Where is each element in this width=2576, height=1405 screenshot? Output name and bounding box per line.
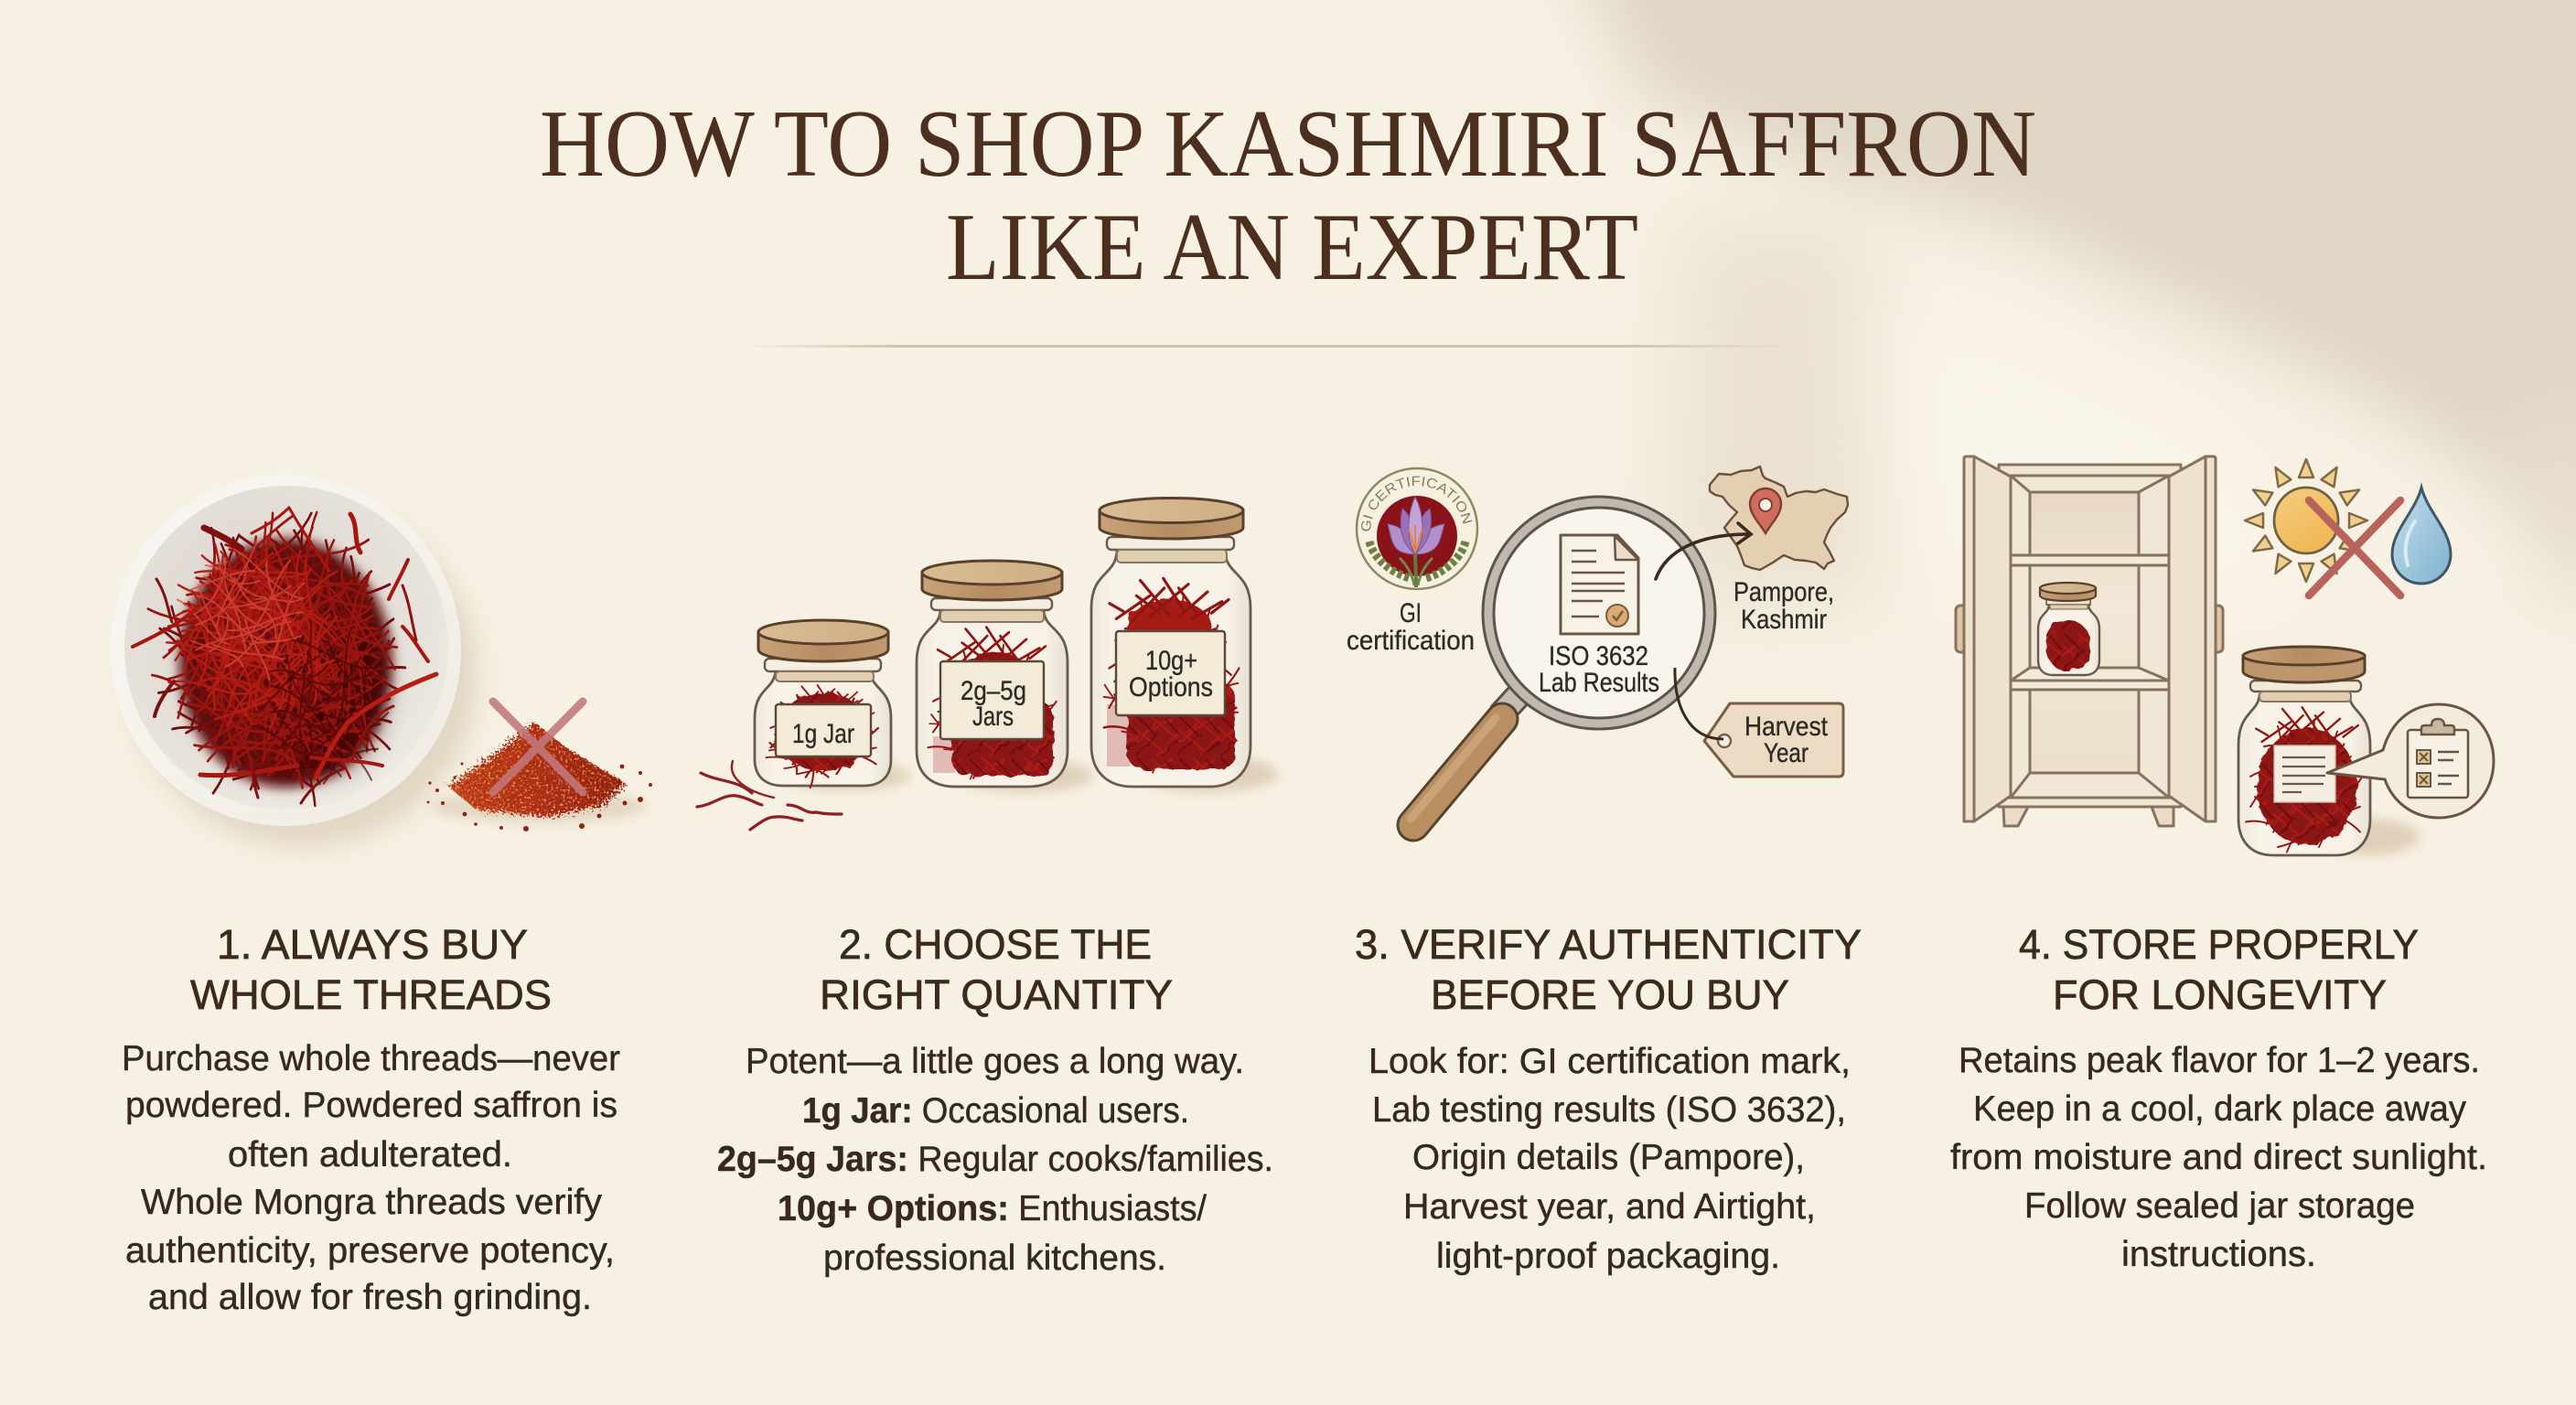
label: 2g-5g jars: Jars xyxy=(972,702,1014,732)
label: ISO 3632 lab results: ISO 3632 xyxy=(1549,641,1648,671)
icon: powdered saffron crossed out xyxy=(427,702,652,831)
text block: step 4: from moisture and direct sunlight. xyxy=(1950,1138,2487,1177)
text block: step 1: often adulterated. xyxy=(228,1135,512,1174)
text block: step 1 xyxy=(122,1039,620,1317)
text block: step 1: authenticity, preserve potency, xyxy=(125,1231,615,1271)
label: 1g jar: 1g Jar xyxy=(792,719,854,749)
text block: step 2: professional kitchens. xyxy=(823,1239,1166,1278)
icon: bowl of saffron threads xyxy=(110,475,478,847)
title: HOW TO SHOP KASHMIRI SAFFRON xyxy=(540,90,2036,197)
text block: step 3: Lab testing results (ISO 3632), xyxy=(1372,1090,1846,1130)
text block: step 4: instructions. xyxy=(2121,1235,2316,1274)
label: Pampore, Kashmir: Kashmir xyxy=(1741,605,1827,635)
text block: step 2: 2g–5g Jars: Regular cooks/families. xyxy=(717,1140,1273,1179)
icon: 10g+ jar xyxy=(1087,498,1279,792)
text block: step 1: powdered. Powdered saffron is xyxy=(125,1086,617,1125)
label: GI certification: GI xyxy=(1400,598,1422,628)
text block: step 3: light-proof packaging. xyxy=(1436,1237,1780,1276)
text block: step 1: and allow for fresh grinding. xyxy=(148,1278,592,1317)
text block: step 1: Whole Mongra threads verify xyxy=(141,1183,603,1222)
label: GI certification: certification xyxy=(1347,626,1475,656)
icon: 1g jar xyxy=(755,620,910,798)
label: 10g+ options: Options xyxy=(1129,672,1213,702)
label: 2g-5g jars: 2g–5g xyxy=(961,676,1026,706)
text block: step 4 xyxy=(1950,1041,2487,1274)
text block: step 2: 10g+ Options: Enthusiasts/ xyxy=(778,1189,1207,1228)
icon: harvest year tag xyxy=(1675,668,1843,777)
label: harvest year xyxy=(1744,712,1829,768)
icon: map of Kashmir with pin xyxy=(1710,467,1848,570)
heading: step 2 xyxy=(820,921,1173,1018)
text block: step 4: Follow sealed jar storage xyxy=(2024,1186,2415,1226)
label: Pampore, Kashmir xyxy=(1733,577,1834,635)
title: LIKE AN EXPERT xyxy=(946,193,1638,300)
text block: step 2: Potent—a little goes a long way. xyxy=(746,1042,1244,1081)
text block: step 3: Origin details (Pampore), xyxy=(1412,1138,1805,1177)
icon: open cabinet xyxy=(1956,456,2223,826)
text block: step 2: 1g Jar: Occasional users. xyxy=(802,1091,1189,1131)
text block: step 3 xyxy=(1368,1042,1851,1276)
label: ISO 3632 lab results: Lab Results xyxy=(1539,668,1659,698)
icon: magnifying glass xyxy=(1411,502,1710,825)
heading: step 2: RIGHT QUANTITY xyxy=(820,971,1173,1018)
label: harvest year: Harvest xyxy=(1744,712,1829,742)
heading: step 3: 3. VERIFY AUTHENTICITY xyxy=(1355,921,1862,968)
panel: step 4 storage xyxy=(1950,456,2494,1274)
label: Pampore, Kashmir: Pampore, xyxy=(1733,577,1834,607)
icon: sealed jar with label xyxy=(2238,647,2420,855)
text block: step 4: Retains peak flavor for 1–2 years. xyxy=(1959,1041,2480,1080)
panel: step 2 quantity xyxy=(697,498,1279,1278)
icon: GI certification badge: GI CERTIFICATION xyxy=(1361,476,1473,531)
icon: lab document xyxy=(1561,535,1638,634)
icon: loose threads xyxy=(697,761,842,830)
label: GI certification xyxy=(1347,598,1475,656)
icon: 2g-5g jar xyxy=(917,561,1093,792)
heading: step 1: 1. ALWAYS BUY xyxy=(217,921,528,968)
icon: no sun and moisture xyxy=(2245,459,2451,595)
icon: jar on shelf xyxy=(2038,583,2099,675)
label: 10g+ options: 10g+ xyxy=(1145,646,1197,676)
heading: step 3: BEFORE YOU BUY xyxy=(1431,971,1789,1018)
heading: step 1 xyxy=(190,921,552,1018)
text block: step 3: Harvest year, and Airtight, xyxy=(1403,1187,1816,1227)
panel: step 1 whole threads xyxy=(110,475,652,1317)
callout: storage checklist xyxy=(2327,704,2494,818)
text block: step 1: Purchase whole threads—never xyxy=(122,1039,620,1078)
label: 2g-5g jars xyxy=(961,676,1026,732)
heading: step 4 xyxy=(2019,921,2419,1018)
icon: GI certification badge xyxy=(1356,467,1478,591)
label: harvest year: Year xyxy=(1764,738,1809,768)
heading: step 4: FOR LONGEVITY xyxy=(2053,971,2387,1018)
text block: step 4: Keep in a cool, dark place away xyxy=(1973,1089,2466,1129)
text block: step 3: Look for: GI certification mark, xyxy=(1368,1042,1851,1081)
panel: step 3 authenticity xyxy=(1347,465,1862,1276)
heading: step 2: 2. CHOOSE THE xyxy=(839,921,1152,968)
heading: step 4: 4. STORE PROPERLY xyxy=(2019,921,2419,968)
arrow: to Pampore xyxy=(1656,523,1751,579)
heading: step 1: WHOLE THREADS xyxy=(190,971,552,1018)
heading: step 3 xyxy=(1355,921,1862,1018)
label: 10g+ options xyxy=(1129,646,1213,702)
title xyxy=(540,90,2036,300)
label: ISO 3632 lab results xyxy=(1539,641,1659,698)
text block: step 2 xyxy=(717,1042,1273,1278)
